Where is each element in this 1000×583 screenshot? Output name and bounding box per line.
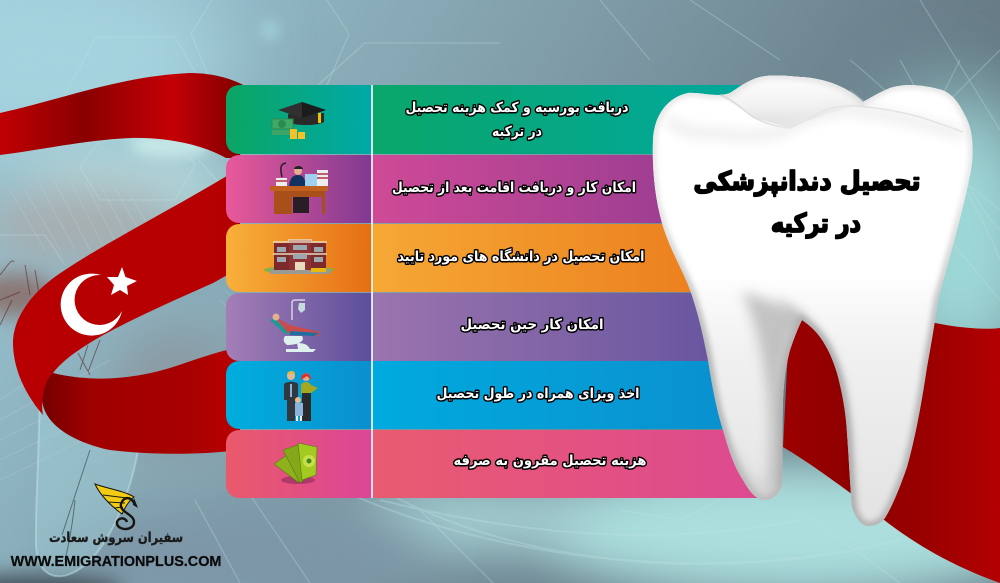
row 2 label panel	[372, 155, 760, 223]
ribbon: lower right band	[783, 310, 1000, 583]
row 4 label panel	[372, 293, 760, 361]
row 2 icon panel	[226, 155, 372, 223]
row 6: affordable tuition	[226, 430, 757, 498]
logo	[11, 484, 221, 570]
divider line between icons and labels	[371, 85, 373, 498]
row 3 label panel	[372, 224, 760, 292]
row 6 icon panel	[226, 430, 372, 498]
title: در ترکیه	[771, 209, 861, 239]
row 5: companion visa	[226, 361, 760, 429]
row 3 text: امکان تحصیل در دانشگاه های مورد تایید	[398, 248, 644, 265]
row 1 label panel	[372, 85, 760, 154]
icon: graduation cap and money	[272, 102, 326, 139]
row 2 text: امکان کار و دریافت اقامت بعد از تحصیل	[392, 180, 636, 196]
row 1 icon panel	[226, 85, 372, 154]
icon: winged swan emblem	[95, 484, 138, 529]
icon: banknotes	[274, 443, 317, 484]
row 1: scholarship	[226, 85, 760, 154]
row 1 text: دریافت بورسیه و کمک هزینه تحصیل	[406, 100, 628, 116]
brand name: سفیران سروش سعادت	[49, 530, 183, 546]
ribbon: lower swirl back band	[42, 347, 240, 454]
row 5 label panel	[372, 361, 760, 429]
icon: person at a desk	[270, 163, 328, 214]
row 4 text: امکان کار حین تحصیل	[460, 317, 604, 333]
row 4 icon panel	[226, 293, 372, 361]
row 5 text: اخذ ویزای همراه در طول تحصیل	[436, 386, 640, 402]
row 1 text: در ترکیه	[492, 124, 542, 140]
tooth illustration	[640, 60, 980, 526]
ribbon: top band	[0, 73, 245, 158]
website: WWW.EMIGRATIONPLUS.COM	[11, 554, 221, 570]
ribbon: main swirl band	[13, 168, 240, 415]
icon: family	[284, 371, 318, 421]
row 6 label panel	[372, 430, 757, 498]
flag emblem: crescent and star	[61, 267, 137, 336]
row 3: universities	[226, 224, 760, 292]
row 6 text: هزینه تحصیل مقرون به صرفه	[454, 453, 646, 469]
row 1 text	[406, 100, 628, 140]
title: تحصیل دندانپزشکی	[694, 167, 920, 197]
title	[694, 167, 920, 239]
icon: university building	[264, 240, 334, 274]
row 5 icon panel	[226, 361, 372, 429]
icon: dental chair	[270, 300, 320, 352]
row 2: work and residence	[226, 155, 760, 223]
row 3 icon panel	[226, 224, 372, 292]
row 4: work while studying	[226, 293, 760, 361]
